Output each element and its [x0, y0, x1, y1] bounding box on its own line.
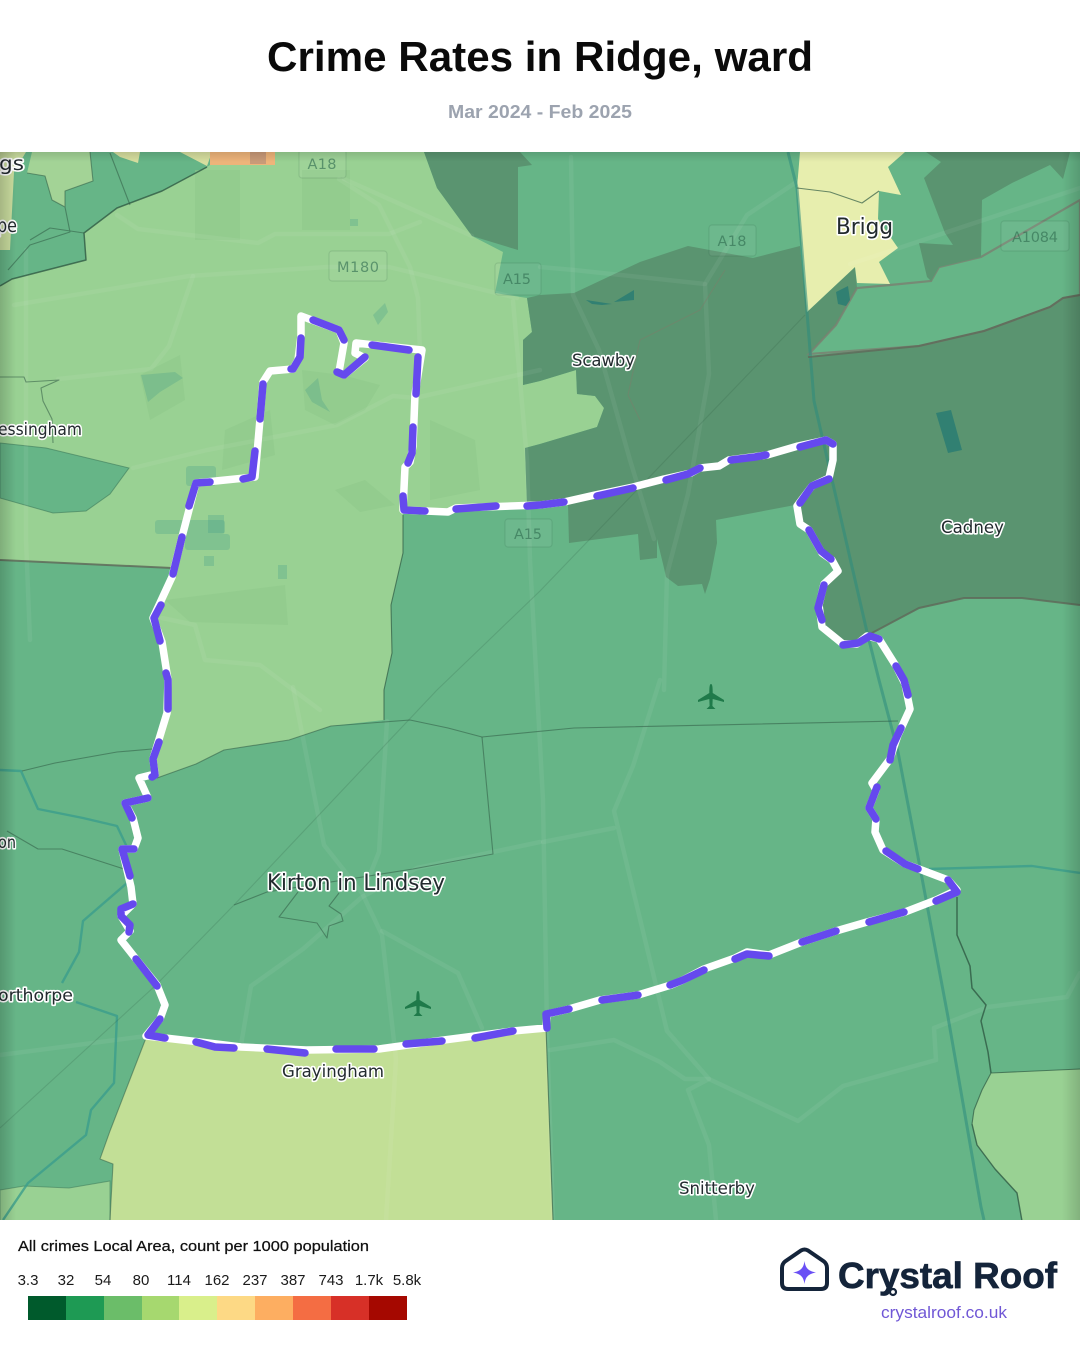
road label: A18 east: A18: [718, 234, 746, 250]
title: Crime Rates in Ridge, ward: [267, 33, 813, 80]
icon: airplane south: [405, 991, 431, 1016]
roads: [0, 157, 1080, 1220]
field patches in light green area: [195, 170, 200, 172]
area: medium green west patch: [0, 443, 129, 513]
road label: A15 north: A15: [503, 272, 531, 288]
area: small darker patch inside orange: [250, 152, 266, 164]
road label: A15 south: [505, 519, 552, 547]
website address: crystalroof.co.uk: [881, 1304, 1008, 1322]
road label: A1084: A1084: [1012, 230, 1058, 246]
place label: Grayingham: Grayingham: [282, 1062, 384, 1082]
place label: Brigg: Brigg: [836, 215, 893, 240]
road label: A15 south: A15: [514, 527, 542, 543]
legend scale labels: [18, 1272, 422, 1289]
area: orange patch top: [210, 152, 275, 165]
legend scale labels: 32: [58, 1272, 74, 1289]
road label: A1084: [1001, 221, 1069, 251]
road label: M180: [329, 251, 387, 281]
legend scale labels: 1.7k: [355, 1272, 384, 1289]
water and industrial patches: [141, 219, 388, 579]
area: light patch top-left: [27, 152, 93, 207]
place label: Messingham fragment: essingham: [0, 420, 82, 440]
area: dark green centre and east: [523, 246, 1080, 644]
road label: A15 north: [495, 263, 541, 295]
place label: Scawby: Scawby: [572, 351, 635, 371]
subtitle: date range: Mar 2024 - Feb 2025: [448, 101, 632, 122]
river channels: [0, 770, 1080, 1220]
legend title: All crimes Local Area, count per 1000 population: [18, 1238, 369, 1255]
map base: medium green areas: [0, 152, 1080, 1220]
place label: Cadney: Cadney: [941, 518, 1004, 538]
legend scale labels: 5.8k: [393, 1272, 422, 1289]
thin boundary lines: [0, 152, 1080, 1221]
legend scale labels: 237: [242, 1272, 268, 1289]
icon: house with star: [782, 1250, 827, 1289]
area: pale green south: [100, 1028, 553, 1220]
road label: A18 east: [709, 225, 756, 256]
place label: Northorpe fragment: orthorpe: [0, 986, 73, 1006]
place label: Kirton in Lindsey: Kirton in Lindsey: [267, 871, 445, 896]
map panel: [0, 150, 1080, 1221]
logo wordmark: Crystal Roof: [838, 1255, 1058, 1296]
area: Brigg yellow: [797, 152, 905, 312]
road label: M180: M180: [337, 260, 379, 276]
legend scale labels: 80: [133, 1272, 149, 1289]
road label: A18 west: A18: [308, 157, 336, 173]
legend scale labels: 743: [318, 1272, 344, 1289]
area: dark green north: [424, 152, 532, 250]
area: light green south-west: [0, 1181, 110, 1221]
ward boundary: white line: [121, 316, 957, 1050]
legend scale labels: 114: [167, 1272, 191, 1289]
railway line: [788, 152, 984, 1220]
place label: Snitterby: Snitterby: [679, 1179, 755, 1199]
wordmark key detail under the y: [890, 1289, 896, 1295]
area: cream patches top: [113, 152, 212, 166]
map edge shading: [0, 152, 1080, 1220]
area: medium green south of Brigg: [809, 200, 1080, 354]
road label: A18 west: [299, 150, 346, 178]
legend scale labels: 3.3: [18, 1272, 38, 1289]
logo: Crystal Roof: [782, 1250, 1058, 1322]
legend scale labels: 387: [280, 1272, 306, 1289]
dark boundary lines: [0, 295, 1080, 634]
icon: airplane north-east: [698, 684, 724, 709]
legend scale labels: 54: [95, 1272, 111, 1289]
area: dark green north-east: [919, 152, 1070, 281]
ward boundary: purple dashes: [121, 320, 957, 1053]
area: pale strip top-left: [0, 152, 26, 250]
legend: [18, 1238, 422, 1320]
legend colour bar: [28, 1296, 407, 1320]
area: light green north-west: [0, 152, 604, 778]
area: light green south-east: [972, 1069, 1080, 1221]
legend scale labels: 162: [204, 1272, 230, 1289]
